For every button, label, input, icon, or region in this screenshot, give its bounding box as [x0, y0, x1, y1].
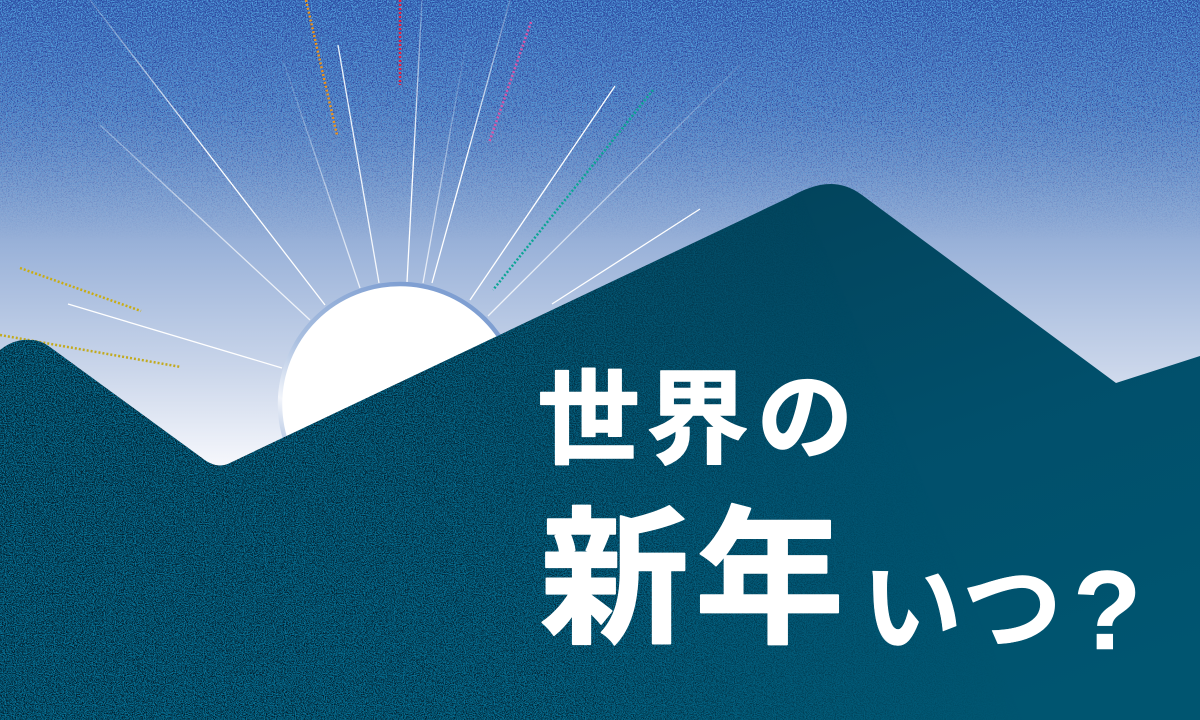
title line 1: 界 — [646, 336, 749, 485]
title line 2: 年 — [695, 458, 844, 674]
title line 2: 新 — [540, 458, 689, 674]
mountains — [0, 170, 1200, 720]
rising sun — [280, 284, 520, 524]
title — [537, 336, 1141, 674]
title line 2 suffix: い — [862, 527, 962, 672]
title line 1 particle: の — [757, 340, 853, 479]
sky background — [0, 0, 1200, 466]
question mark: ? — [1073, 548, 1141, 673]
dotted coloured rays — [0, 0, 653, 367]
title line 1: 世 — [537, 336, 640, 485]
sun rays — [68, 0, 740, 368]
title line 2 suffix: つ — [962, 527, 1062, 672]
